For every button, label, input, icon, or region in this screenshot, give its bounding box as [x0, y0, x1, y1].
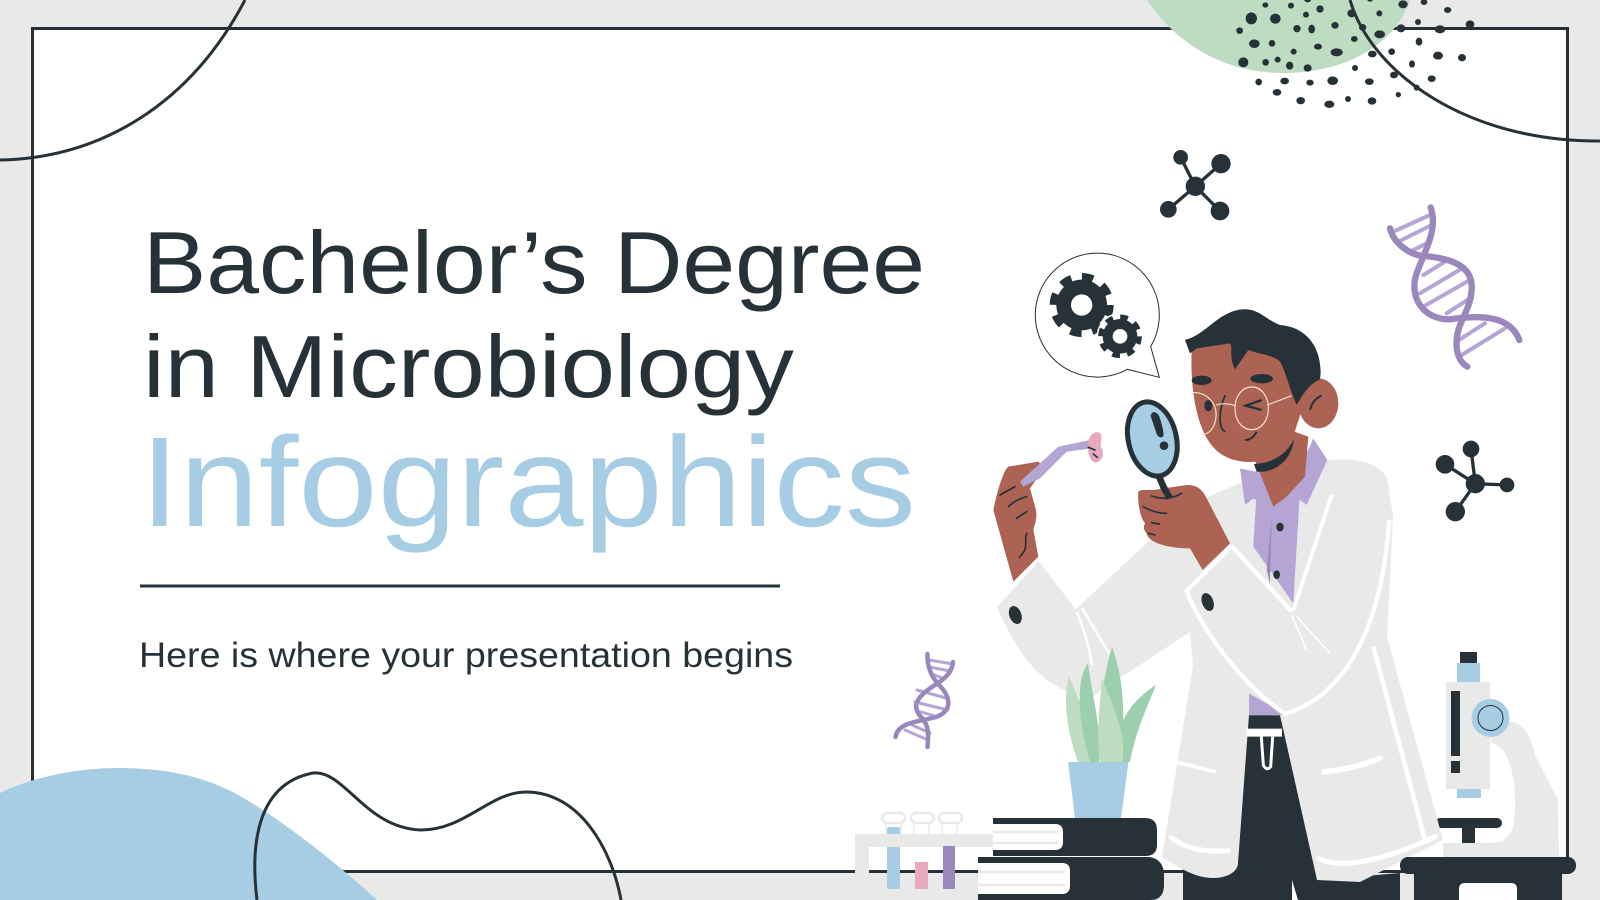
ear — [1298, 378, 1338, 428]
icon: speech bubble with gears — [1035, 253, 1159, 377]
test tube rack — [855, 813, 993, 889]
title: in Microbiology — [143, 317, 794, 416]
divider rule — [140, 584, 780, 588]
belt band — [1247, 729, 1282, 769]
green blob — [1147, 0, 1410, 73]
collar — [1240, 438, 1327, 508]
blue blob — [0, 768, 377, 900]
neck — [1253, 427, 1308, 507]
icon: molecule top — [1160, 150, 1231, 220]
left hand — [993, 462, 1041, 582]
plant pot — [1068, 762, 1128, 818]
magnifying glass — [1120, 397, 1184, 498]
microscope — [1435, 652, 1559, 857]
chin shadow — [1254, 439, 1294, 472]
pants — [1183, 715, 1400, 900]
books — [978, 818, 1164, 900]
lab coat — [997, 460, 1443, 882]
scientist upper body — [993, 309, 1338, 626]
right hand — [1138, 485, 1230, 570]
icon: large DNA — [1390, 207, 1519, 367]
icon: molecule right — [1436, 441, 1514, 521]
face details — [1192, 374, 1273, 440]
plant — [1066, 647, 1156, 762]
specimen — [1088, 432, 1103, 463]
arc top left — [0, 0, 245, 160]
glasses — [1192, 387, 1292, 434]
heading: Infographics: Infographics — [140, 411, 916, 554]
icon: small DNA — [896, 654, 953, 747]
title — [143, 213, 925, 416]
shirt — [1249, 490, 1300, 715]
left cuff button — [1007, 604, 1024, 626]
bench — [1400, 857, 1576, 900]
hair — [1185, 309, 1321, 405]
squiggle bottom — [255, 773, 621, 900]
dot pattern — [1236, 0, 1474, 108]
arc top right — [1350, 0, 1600, 141]
tweezers — [1020, 440, 1092, 487]
title: Bachelor’s Degree — [143, 213, 925, 312]
face — [1191, 333, 1313, 462]
forearm sleeve — [1171, 495, 1435, 863]
subtitle: Here is where your presentation begins — [139, 636, 793, 675]
